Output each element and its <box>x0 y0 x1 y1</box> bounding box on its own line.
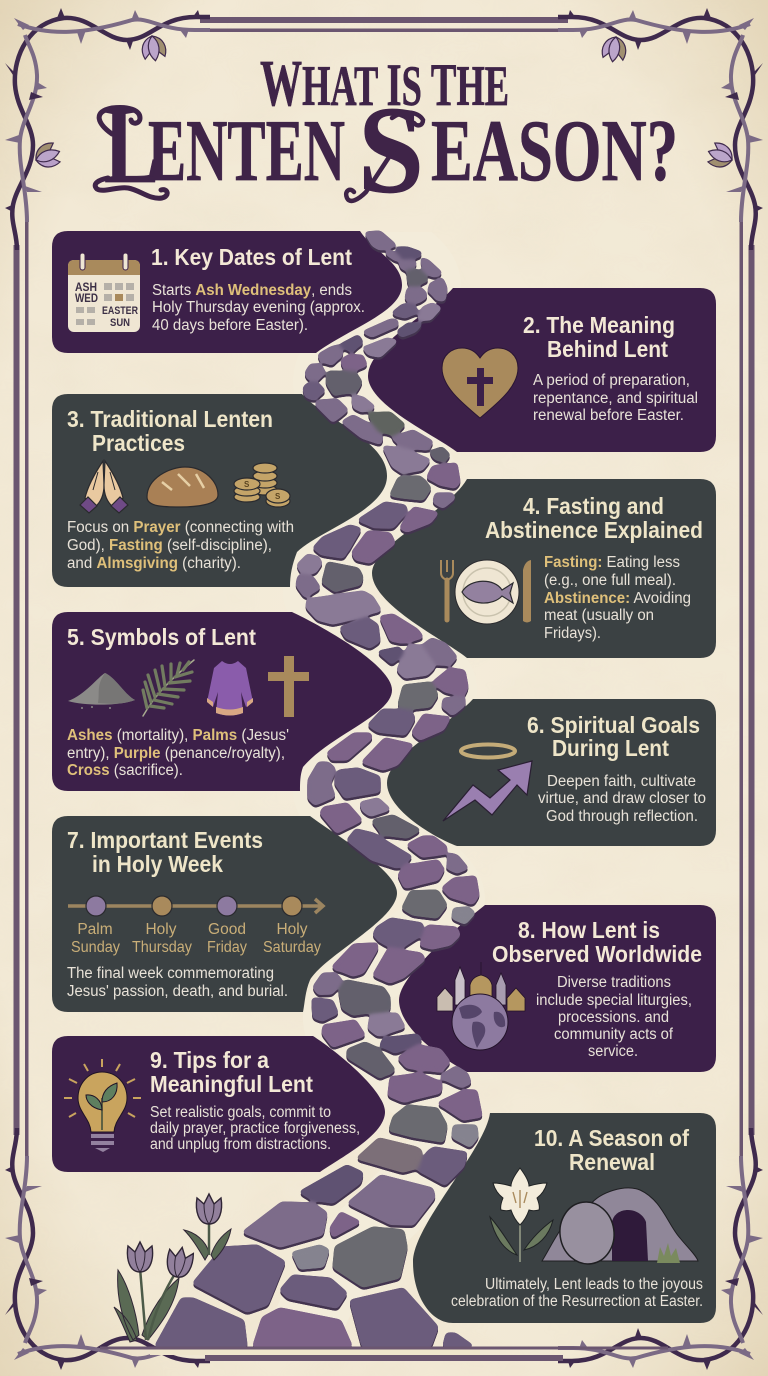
panel 3: practices <box>52 394 387 587</box>
body text <box>67 965 288 1000</box>
body text: Deepen faith, cultivate <box>547 773 696 790</box>
heading <box>492 917 702 967</box>
timeline: Good <box>208 921 246 938</box>
timeline: Holy <box>276 921 308 938</box>
heading <box>527 712 700 761</box>
panel 7: holy week <box>52 816 397 1012</box>
body text: renewal before Easter. <box>533 407 684 424</box>
icon: coins: S <box>244 480 250 489</box>
icon: coins: S <box>275 492 281 501</box>
heading: 2. The Meaning <box>523 312 675 338</box>
panel 5: symbols <box>52 612 392 791</box>
body text: Ashes (mortality), Palms (Jesus' <box>67 727 289 744</box>
panel 10: renewal <box>413 1113 716 1323</box>
body text: meat (usually on <box>544 607 654 624</box>
panel 8: worldwide <box>399 905 716 1072</box>
body text: (e.g., one full meal). <box>544 572 676 589</box>
body text: daily prayer, practice forgiveness, <box>150 1120 360 1137</box>
road band <box>300 225 450 1345</box>
bottom frame bars over path <box>100 1346 668 1361</box>
icon: praying hands <box>80 461 128 513</box>
body text: Holy Thursday evening (approx. <box>152 299 365 316</box>
title line two: S <box>358 82 424 220</box>
timeline <box>68 896 323 956</box>
title line two <box>95 82 678 220</box>
body text <box>544 554 691 642</box>
heading <box>150 1047 313 1097</box>
heading: 9. Tips for a <box>150 1047 269 1073</box>
icon: globe and churches <box>437 962 525 1050</box>
body text: Fridays). <box>544 625 601 642</box>
body text: God through reflection. <box>546 808 698 825</box>
body text: Diverse traditions <box>557 974 671 991</box>
heading: Practices <box>92 430 185 456</box>
heading: in Holy Week <box>92 851 223 877</box>
body text: virtue, and draw closer to <box>538 790 706 807</box>
heading <box>485 493 703 543</box>
timeline: Sunday <box>71 939 120 956</box>
body text <box>67 727 289 779</box>
heading: 10. A Season of <box>534 1125 689 1151</box>
body text <box>67 519 294 572</box>
body text <box>536 974 692 1060</box>
heading: 8. How Lent is <box>518 917 660 943</box>
heading <box>523 312 675 362</box>
timeline: Thursday <box>132 939 192 956</box>
panel 4: fasting <box>372 479 716 658</box>
panel 1: key dates <box>52 231 402 353</box>
heading <box>67 406 273 456</box>
vines top left <box>5 8 210 250</box>
body text: Ultimately, Lent leads to the joyous <box>485 1276 703 1293</box>
body text: Cross (sacrifice). <box>67 762 183 779</box>
icon: calendar: WED <box>75 291 98 305</box>
icon: rising arrow <box>443 761 532 821</box>
title <box>95 47 678 220</box>
body text: Jesus' passion, death, and burial. <box>67 983 288 1000</box>
heading: Observed Worldwide <box>492 941 702 967</box>
flower top left <box>140 34 167 62</box>
icon: halo <box>461 744 515 758</box>
timeline: Friday <box>207 939 247 956</box>
title line two: L <box>104 83 160 207</box>
body text: processions. and <box>558 1009 669 1026</box>
body text: Abstinence: Avoiding <box>544 590 691 607</box>
icon: palm <box>143 660 194 716</box>
body text: God), Fasting (self-discipline), <box>67 537 272 554</box>
heading: 6. Spiritual Goals <box>527 712 700 738</box>
heading: During Lent <box>552 735 669 761</box>
body text: A period of preparation, <box>533 372 690 389</box>
body text: include special liturgies, <box>536 992 692 1009</box>
flower top right <box>601 35 628 63</box>
vines bottom right <box>558 1128 763 1370</box>
title line one: WHAT IS THE <box>260 47 509 120</box>
panel 9: tips <box>52 1036 385 1172</box>
flower left <box>32 140 63 171</box>
heading: Behind Lent <box>547 336 668 362</box>
icon: calendar: EASTER <box>102 305 138 317</box>
icon: calendar: SUN <box>110 317 130 329</box>
timeline: Palm <box>77 921 113 938</box>
icon: heart with cross <box>442 348 518 418</box>
icon: calendar <box>68 253 140 332</box>
body text: community acts of <box>554 1026 674 1043</box>
body text: service. <box>588 1043 638 1060</box>
body text: and Almsgiving (charity). <box>67 555 241 572</box>
heading <box>67 827 263 877</box>
flower right <box>705 140 736 171</box>
heading: Meaningful Lent <box>150 1071 313 1097</box>
body text <box>533 372 698 424</box>
body text <box>538 773 706 825</box>
icon: tulips <box>114 1194 231 1342</box>
icon: bread <box>147 467 218 507</box>
icon: empty tomb <box>542 1188 698 1267</box>
heading <box>534 1125 689 1175</box>
icon: purple robe <box>207 661 253 716</box>
body text: 40 days before Easter). <box>152 317 308 334</box>
panel 6: goals <box>387 699 716 846</box>
body text: Starts Ash Wednesday, ends <box>152 282 352 299</box>
icon: ashes <box>68 673 135 709</box>
icon: coins <box>234 463 290 507</box>
title line two: EASON? <box>431 103 678 200</box>
body text: and unplug from distractions. <box>150 1136 331 1153</box>
body text: Focus on Prayer (connecting with <box>67 519 294 536</box>
body text: The final week commemorating <box>67 965 274 982</box>
icon: cross <box>268 656 309 717</box>
body text <box>152 282 365 334</box>
heading: 7. Important Events <box>67 827 263 853</box>
body text: Fasting: Eating less <box>544 554 680 571</box>
body text: Set realistic goals, commit to <box>150 1104 331 1121</box>
heading: 5. Symbols of Lent <box>67 624 256 650</box>
vines bottom left <box>5 1128 210 1370</box>
heading: Abstinence Explained <box>485 517 703 543</box>
vines top right <box>558 8 763 250</box>
timeline: Saturday <box>263 939 321 956</box>
icon: lily <box>490 1168 553 1262</box>
body text <box>150 1104 360 1153</box>
icon: calendar: ASH <box>75 280 97 294</box>
body text: celebration of the Resurrection at Easter. <box>451 1293 703 1310</box>
heading: 4. Fasting and <box>523 493 664 519</box>
body text: entry), Purple (penance/royalty), <box>67 745 285 762</box>
body text: repentance, and spiritual <box>533 390 698 407</box>
body text <box>451 1276 703 1310</box>
cobblestone path <box>156 232 481 1346</box>
title line two: ENTEN <box>148 103 345 200</box>
timeline: Holy <box>145 921 177 938</box>
panel 2: meaning <box>368 288 716 452</box>
heading: Renewal <box>569 1149 655 1175</box>
heading: 3. Traditional Lenten <box>67 406 273 432</box>
icon: light bulb <box>64 1059 141 1152</box>
heading: 1. Key Dates of Lent <box>151 244 352 270</box>
icon: fork, plate and knife <box>441 560 531 624</box>
